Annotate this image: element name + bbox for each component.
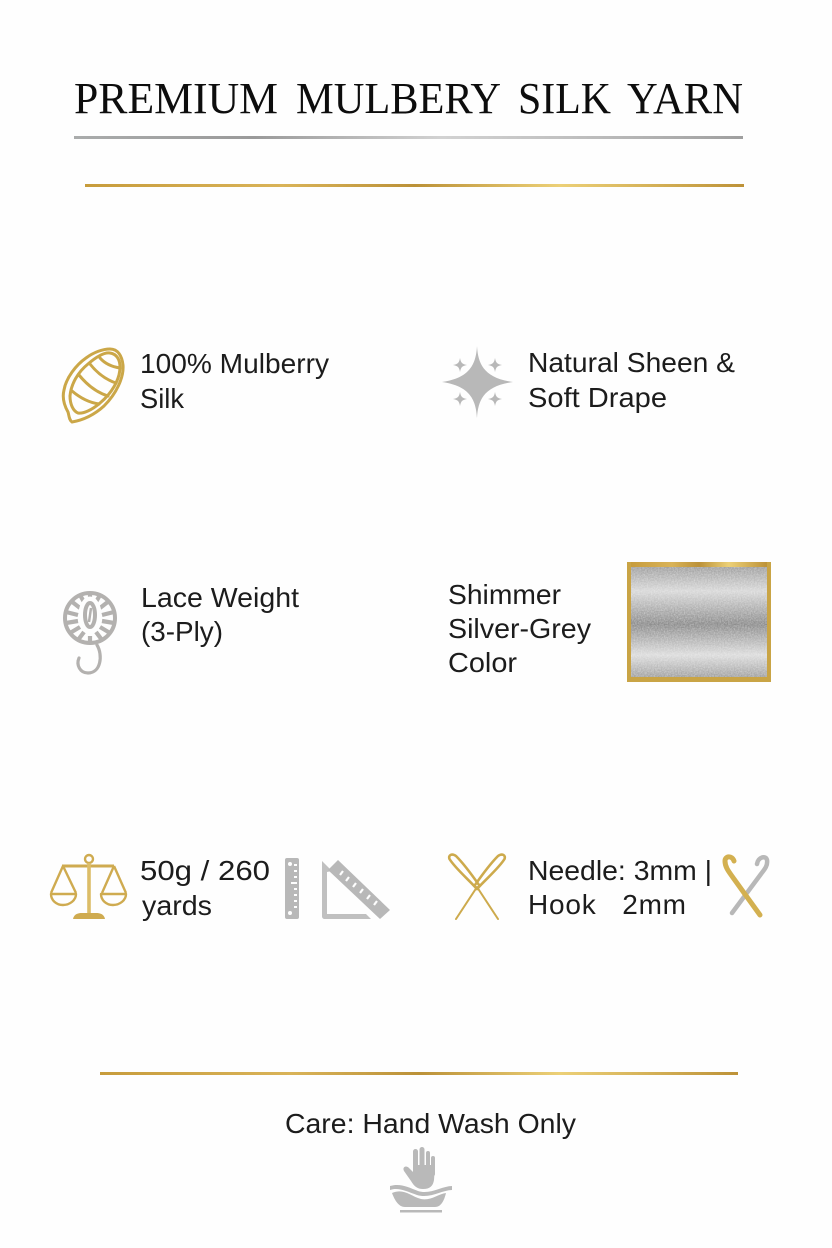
text: Needle and Hook sizes: Hook 2mm: [528, 889, 686, 920]
text: Natural Sheen & Soft Drape: Natural Sheen &: [528, 347, 735, 378]
text: Natural Sheen & Soft Drape: [528, 347, 735, 413]
text: 100% Mulberry Silk: [140, 348, 329, 414]
title: PREMIUM: [74, 73, 278, 123]
title: SILK: [518, 73, 611, 123]
text: care: Care: Hand Wash Only: [285, 1108, 576, 1139]
text: Natural Sheen & Soft Drape: Soft Drape: [528, 382, 667, 413]
text: Needle and Hook sizes: Needle: 3mm |: [528, 855, 712, 886]
text: Shimmer Silver-Grey Color: Shimmer: [448, 579, 561, 610]
icon: hand wash: [390, 1147, 452, 1212]
title: MULBERY: [296, 73, 501, 123]
text: 50g / 260 yards: yards: [142, 890, 212, 921]
icon: sparkle: [442, 346, 513, 418]
text: Shimmer Silver-Grey Color: [448, 579, 591, 678]
text: Lace Weight (3-Ply): Lace Weight: [141, 582, 299, 613]
gold divider bottom: [100, 1072, 738, 1075]
text: Lace Weight (3-Ply): (3-Ply): [141, 616, 223, 647]
icon: yarn ball with hook: [65, 593, 115, 673]
text: 100% Mulberry Silk: Silk: [140, 383, 185, 414]
text: Shimmer Silver-Grey Color: Silver-Grey: [448, 613, 591, 644]
text: 100% Mulberry Silk: 100% Mulberry: [140, 348, 329, 379]
icon: silk cocoon: [63, 349, 123, 422]
title: YARN: [627, 73, 743, 123]
gold divider top: [85, 184, 744, 187]
icon: ruler and set square: [285, 858, 390, 919]
text: 50g / 260 yards: 50g / 260: [140, 855, 270, 886]
color swatch: [627, 562, 771, 682]
text: Shimmer Silver-Grey Color: Color: [448, 647, 517, 678]
icon: crossed crochet hooks: [725, 857, 767, 915]
text: Lace Weight (3-Ply): [141, 582, 299, 647]
icon: balance scale: [51, 855, 126, 919]
title: [74, 73, 743, 123]
icon: crossed knitting needles: [449, 855, 505, 919]
text: Needle and Hook sizes: [528, 855, 712, 920]
text: 50g / 260 yards: [140, 855, 270, 921]
silver title underline: [74, 136, 743, 139]
